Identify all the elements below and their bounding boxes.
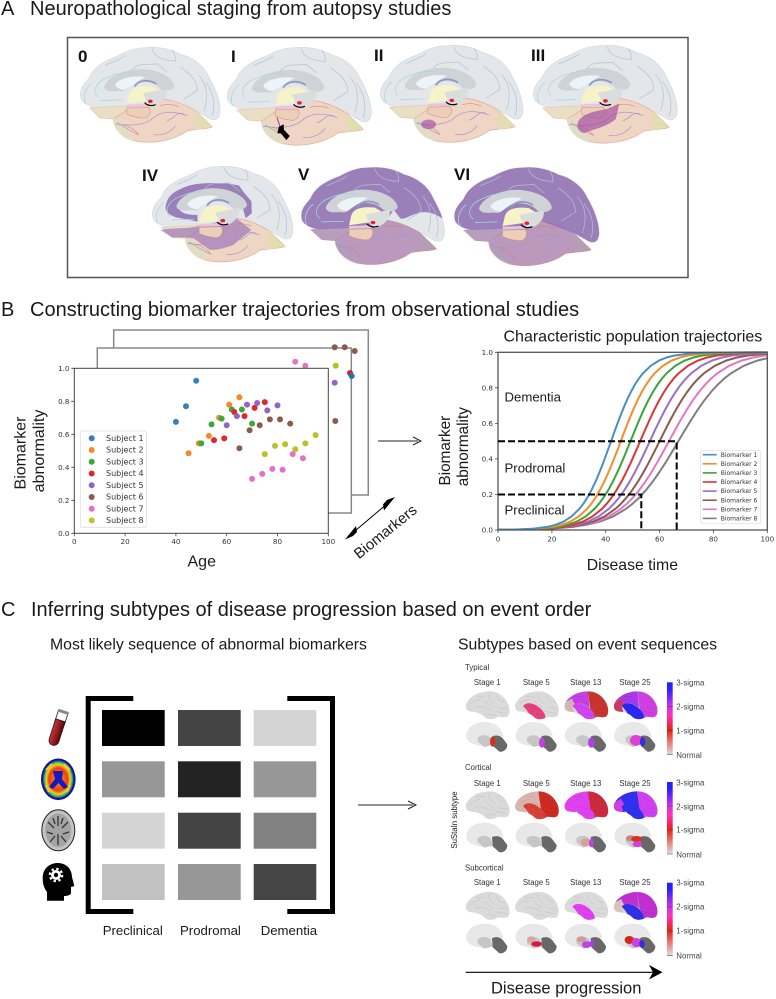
label stage IV: IV: [142, 166, 159, 185]
trajectories legend: Biomarker 4: [721, 479, 757, 486]
stage headers: [474, 779, 651, 788]
arrow to population trajectories: [378, 437, 421, 445]
row 2 cells: [102, 761, 316, 797]
panel B: biomarker trajectories: [1, 299, 776, 574]
scatter y axis label: [12, 410, 48, 492]
colour bar Typical: Normal: [676, 751, 702, 760]
panel A: neuropathological staging: [1, 0, 688, 278]
stage headers: [474, 878, 651, 887]
medial renderings: [467, 823, 655, 852]
scatter plot: 20: [121, 537, 130, 546]
subject 6 points: [236, 416, 293, 451]
cortex renderings: [466, 691, 660, 721]
row 1 cells: [102, 710, 316, 746]
scatter plot: 0.8: [58, 397, 70, 406]
brain stage VI: [454, 167, 599, 266]
medial renderings: [467, 924, 655, 953]
stage headers: Stage 25: [619, 779, 651, 788]
subject 3 points: [198, 406, 255, 446]
heading C: Inferring subtypes of disease progression based on event order: [31, 599, 592, 621]
brain stage V: [301, 167, 444, 265]
biomarker curves: [498, 351, 768, 530]
subject 4 points: [211, 399, 268, 443]
scatter plot: [58, 364, 336, 546]
trajectories legend: Biomarker 7: [721, 506, 757, 513]
trajectories legend: [701, 451, 761, 523]
scatter legend: Subject 1: [106, 434, 144, 443]
stage headers: Stage 13: [570, 779, 601, 788]
stage headers: Stage 25: [619, 878, 651, 887]
stage label Dementia: Dementia: [504, 390, 562, 405]
stage label Prodromal: Prodromal: [504, 461, 565, 476]
label stage VI: VI: [454, 165, 470, 184]
stage headers: Stage 5: [523, 678, 550, 687]
trajectories y axis label: [437, 407, 472, 486]
trajectories y axis label: abnormality: [455, 407, 472, 486]
scatter plot: 0.0: [58, 529, 70, 538]
points on back sheets: [292, 344, 358, 424]
double arrow: across biomarkers: [345, 497, 395, 540]
line chart of trajectories: 80: [709, 535, 718, 544]
title of trajectories chart: Characteristic population trajectories: [504, 328, 762, 346]
cortex renderings: [466, 791, 660, 821]
colour bar Typical: 3-sigma: [676, 678, 705, 688]
colour bar Cortical: 1-sigma: [676, 826, 705, 834]
stage headers: Stage 13: [570, 878, 601, 887]
line chart of trajectories: 0: [496, 535, 501, 544]
matrix of stage by biomarker: [88, 698, 332, 912]
scatter plot: 40: [171, 537, 181, 546]
scatter plot: 1.0: [58, 364, 70, 373]
trajectories legend: Biomarker 1: [721, 452, 757, 459]
column label Prodromal: Prodromal: [180, 923, 241, 938]
icon: PET scan: [41, 758, 76, 800]
scatter legend: Subject 5: [106, 481, 144, 490]
scatter plot: 0.6: [58, 430, 70, 439]
colour bar Subcortical: Normal: [676, 952, 702, 960]
subject 2 points: [186, 394, 242, 456]
stage label Preclinical: Preclinical: [504, 502, 565, 517]
icon: MRI scan: [42, 810, 75, 851]
subject 5 points: [224, 400, 280, 428]
scatter legend: [80, 431, 146, 527]
brain stage III: [533, 45, 677, 143]
stage headers: Stage 1: [474, 779, 501, 788]
subject 8 points: [262, 432, 319, 457]
colour bar Cortical: [667, 778, 705, 860]
colour bar Subcortical: 2-sigma: [676, 903, 705, 912]
trajectories legend: Biomarker 5: [721, 488, 757, 495]
scatter x axis label: Age: [188, 554, 216, 570]
panel letter C: C: [1, 599, 15, 621]
label stage I: I: [231, 47, 236, 66]
colour bar Cortical: Normal: [676, 850, 702, 860]
line chart of trajectories: 0.8: [482, 384, 493, 392]
row 3 cells: [102, 813, 316, 849]
column label Dementia: Dementia: [261, 923, 318, 938]
cortex renderings: [466, 891, 660, 921]
scatter legend: Subject 7: [106, 504, 144, 513]
subheading right: Subtypes based on event sequences: [458, 636, 717, 653]
scatter legend: Subject 3: [106, 458, 144, 466]
brain stage 0: [80, 47, 220, 142]
scatter y axis label: Biomarker: [12, 416, 30, 489]
label Disease progression: Disease progression: [491, 979, 641, 997]
back scatter sheets: [97, 330, 368, 513]
line chart of trajectories: 0.6: [482, 419, 493, 428]
panel letter B: B: [1, 299, 14, 321]
stage headers: Stage 25: [619, 678, 651, 687]
subject 7 points: [249, 451, 306, 482]
stage headers: Stage 5: [523, 779, 550, 788]
label stage III: III: [531, 46, 545, 65]
scatter legend: Subject 8: [106, 516, 144, 525]
scatter legend: Subject 6: [106, 493, 144, 502]
colour bar Subcortical: 3-sigma: [676, 878, 705, 888]
icon: head with gear: [43, 863, 74, 901]
colour bar Typical: 1-sigma: [676, 726, 705, 736]
dashed stage boundaries: [498, 441, 677, 530]
colour bar Cortical: 2-sigma: [676, 802, 705, 812]
icon: blood tube: [47, 709, 69, 747]
trajectories legend: Biomarker 2: [721, 461, 757, 468]
line chart of trajectories: 0.0: [482, 526, 493, 535]
subtype row: Typical: [465, 663, 705, 760]
label Biomarkers: Biomarkers: [351, 502, 420, 563]
scatter y axis label: abnormality: [31, 410, 48, 492]
frame of staging figure: [68, 38, 688, 278]
column label Preclinical: Preclinical: [103, 923, 163, 938]
arrow: disease progression: [466, 965, 662, 980]
label stage II: II: [374, 46, 383, 65]
label Cortical: Cortical: [465, 763, 492, 772]
subheading left: Most likely sequence of abnormal biomarkers: [50, 636, 367, 653]
brain stage IV: [152, 166, 293, 262]
line chart of trajectories: 100: [760, 535, 775, 544]
right bracket: [287, 698, 332, 912]
trajectories legend: Biomarker 3: [721, 470, 757, 477]
stage headers: Stage 1: [474, 878, 501, 887]
scatter plot: 0.2: [58, 496, 70, 505]
scatter plot: 60: [222, 537, 232, 546]
colour bar Cortical: 3-sigma: [676, 778, 705, 788]
colour bar Subcortical: [667, 878, 705, 960]
scatter plot: 0.4: [58, 463, 70, 472]
line chart of trajectories: 20: [547, 535, 557, 544]
line chart of trajectories: [482, 350, 774, 542]
rotated SuStaIn subtype label: SuStaIn subtype: [450, 791, 459, 849]
arrow to subtypes: [358, 801, 416, 809]
trajectories legend: Biomarker 6: [721, 497, 757, 504]
line chart of trajectories: 40: [601, 535, 611, 544]
scatter legend: Subject 2: [106, 446, 144, 455]
trajectories x axis label: Disease time: [587, 557, 678, 574]
subtype row: Cortical: [465, 763, 705, 860]
line chart of trajectories: 0.2: [482, 490, 493, 499]
brain stage II: [380, 45, 523, 142]
label Subcortical: Subcortical: [465, 864, 504, 873]
colour bar Typical: [667, 678, 705, 760]
colour bar Typical: 2-sigma: [676, 702, 705, 712]
label stage 0: 0: [78, 47, 87, 66]
row 4 cells: [102, 864, 316, 900]
left bracket: [88, 698, 133, 912]
brain stage I: [227, 47, 371, 145]
subject 1 points: [173, 378, 199, 425]
trajectories y axis label: Biomarker: [437, 416, 454, 485]
stage headers: [474, 678, 651, 687]
line chart of trajectories: 60: [655, 535, 665, 544]
medial renderings: [467, 722, 655, 752]
subtype row: Subcortical: [465, 864, 705, 960]
stage headers: Stage 1: [474, 678, 501, 687]
heading B: Constructing biomarker trajectories from observational studies: [30, 299, 579, 321]
line chart of trajectories: 1.0: [482, 348, 493, 357]
label stage V: V: [298, 165, 310, 184]
scatter plot: 80: [273, 537, 282, 546]
colour bar Subcortical: 1-sigma: [676, 927, 705, 936]
label Typical: Typical: [465, 663, 490, 672]
scatter legend: Subject 4: [106, 469, 144, 478]
scatter plot: 100: [321, 537, 336, 546]
trajectories legend: Biomarker 8: [721, 516, 757, 522]
stage headers: Stage 5: [523, 878, 550, 887]
scatter plot: 0: [72, 537, 77, 546]
stage headers: Stage 13: [570, 678, 601, 687]
panel C: subtypes of progression: [1, 599, 717, 997]
line chart of trajectories: 0.4: [482, 455, 493, 464]
